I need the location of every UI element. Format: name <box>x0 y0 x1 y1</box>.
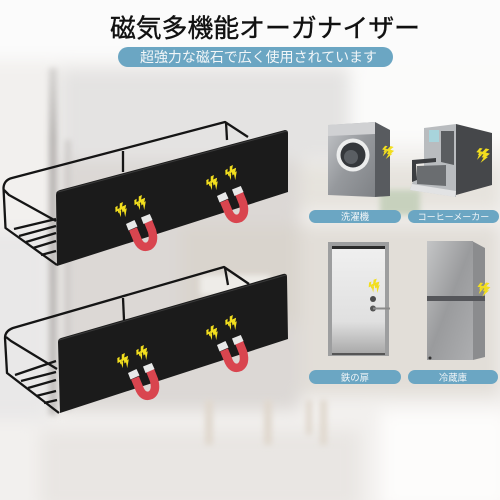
wire basket <box>5 267 249 413</box>
label: refrigerator <box>408 370 498 384</box>
label: washing machine <box>309 210 401 223</box>
title: 磁気多機能オーガナイザー <box>110 14 420 43</box>
icon: refrigerator <box>427 241 492 360</box>
icon: magnet left <box>116 344 155 396</box>
icon: magnet left <box>114 194 153 247</box>
label: coffee maker: コーヒーメーカー <box>418 212 489 222</box>
icon: washing machine <box>328 122 396 197</box>
back panel <box>56 130 288 266</box>
label: steel door <box>309 370 401 384</box>
label: steel door: 鉄の扉 <box>341 372 369 383</box>
icon: steel door <box>328 242 390 356</box>
subtitle pill <box>118 47 393 67</box>
label: washing machine: 洗濯機 <box>341 211 370 222</box>
icon: magnet right <box>205 314 244 368</box>
icon: coffee maker <box>410 124 492 197</box>
wire basket <box>4 122 248 265</box>
label: coffee maker <box>408 210 499 223</box>
subtitle pill: 超強力な磁石で広く使用されています <box>140 49 377 65</box>
shelf: lower <box>5 267 288 413</box>
label: refrigerator: 冷蔵庫 <box>439 372 467 383</box>
shelf: upper <box>4 122 288 266</box>
icon: magnet right <box>205 164 244 219</box>
back panel <box>58 274 288 413</box>
